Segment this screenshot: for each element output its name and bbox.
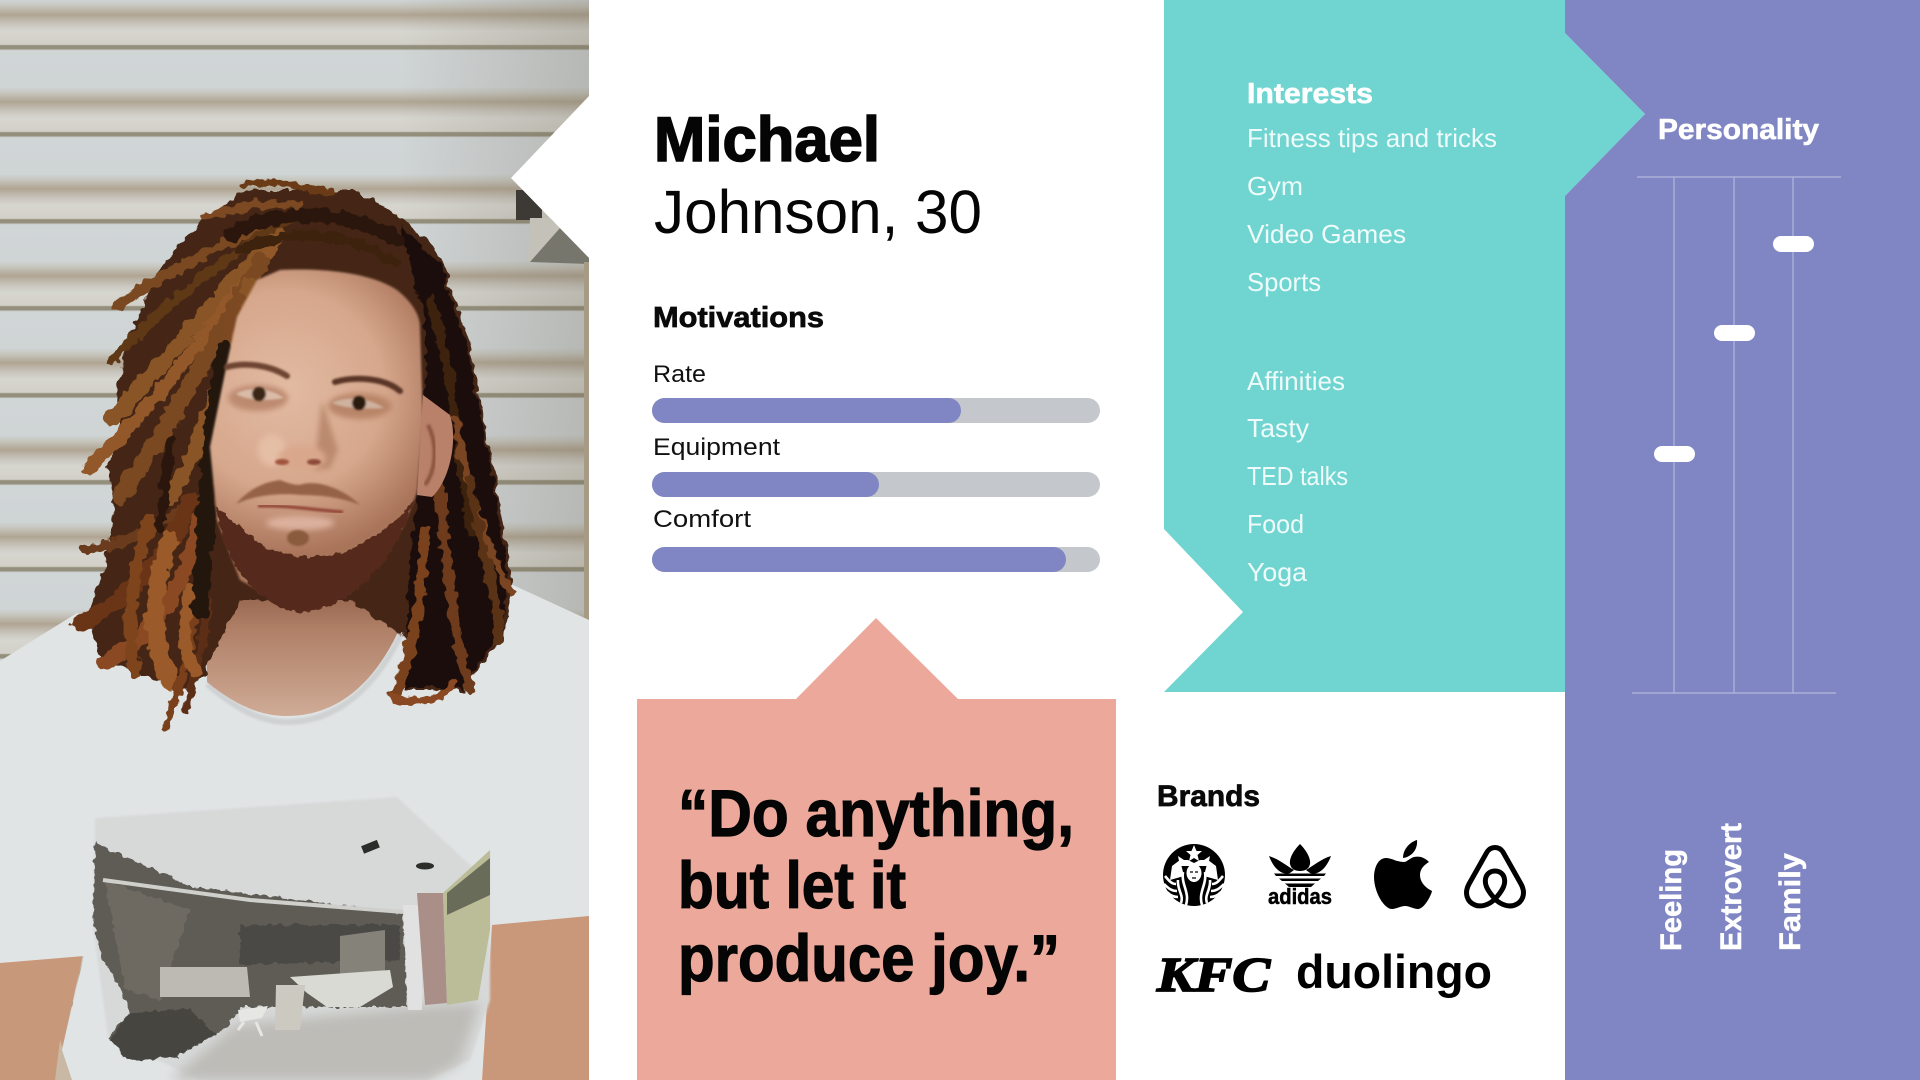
logo: KFC: KFC bbox=[1156, 947, 1272, 1002]
slider marker: extrovert bbox=[1714, 325, 1755, 341]
panel: quote callout (pink) bbox=[637, 618, 1116, 1080]
title: name and age: Michael bbox=[654, 105, 880, 175]
slider marker: family bbox=[1773, 236, 1814, 252]
title: name and age: Johnson, 30 bbox=[654, 178, 982, 246]
axis labels: Extrovert bbox=[1715, 823, 1748, 951]
panel: brands bbox=[1156, 780, 1523, 1002]
slider marker: feeling bbox=[1654, 446, 1695, 462]
panel: motivations bbox=[652, 302, 1100, 572]
axis labels: Feeling bbox=[1655, 849, 1688, 951]
bar: rate bbox=[652, 361, 1100, 423]
list: interests: Fitness tips and tricks bbox=[1247, 123, 1497, 153]
heading: Interests: Interests bbox=[1247, 78, 1373, 110]
logo: adidas: adidas bbox=[1268, 884, 1332, 909]
title: name and age bbox=[654, 105, 982, 246]
list: affinities: TED talks bbox=[1247, 461, 1348, 491]
bar: equipment bbox=[652, 434, 1100, 497]
list: affinities: Affinities bbox=[1247, 366, 1345, 396]
photo: shirt print of a garage bbox=[93, 797, 490, 1080]
photo: portrait of Michael bbox=[0, 0, 589, 1080]
heading: Brands: Brands bbox=[1157, 780, 1260, 813]
quote text bbox=[678, 776, 1074, 995]
heading: Personality: Personality bbox=[1658, 114, 1819, 146]
axis labels: Family bbox=[1774, 853, 1807, 951]
panel: personality (purple) bbox=[1565, 0, 1920, 1080]
heading: Motivations: Motivations bbox=[653, 302, 824, 334]
photo background: slatted shutter wall bbox=[0, 0, 589, 1080]
axis labels bbox=[1655, 823, 1807, 951]
quote text: “Do anything, bbox=[678, 776, 1074, 850]
chart: personality sliders bbox=[1632, 177, 1841, 693]
logo: adidas bbox=[1268, 844, 1332, 909]
list: interests bbox=[1247, 123, 1497, 297]
quote text: produce joy.” bbox=[678, 921, 1060, 995]
photo: dreadlock hair bbox=[80, 183, 512, 728]
panel: interests (teal) bbox=[1164, 0, 1645, 692]
list: interests: Video Games bbox=[1247, 219, 1406, 249]
bar: rate: Rate bbox=[653, 361, 706, 388]
list: affinities: Yoga bbox=[1247, 557, 1308, 587]
photo: neck bbox=[206, 600, 398, 716]
photo: arms and skin bbox=[0, 915, 589, 1080]
logo: duolingo: duolingo bbox=[1296, 945, 1492, 998]
bar: equipment: Equipment bbox=[653, 434, 780, 461]
photo: eyes and brows bbox=[227, 365, 400, 410]
logo: airbnb bbox=[1467, 848, 1523, 906]
bar: comfort bbox=[652, 506, 1100, 572]
quote text: but let it bbox=[678, 848, 906, 922]
list: interests: Sports bbox=[1247, 267, 1321, 297]
list: interests: Gym bbox=[1247, 171, 1303, 201]
logo: starbucks bbox=[1163, 844, 1225, 906]
bar: comfort: Comfort bbox=[653, 506, 751, 533]
list: affinities: Food bbox=[1247, 509, 1304, 539]
photo: face bbox=[210, 270, 453, 613]
list: affinities bbox=[1247, 366, 1348, 587]
logo: apple bbox=[1374, 840, 1432, 909]
list: affinities: Tasty bbox=[1247, 413, 1309, 443]
photo: white t-shirt bbox=[0, 585, 589, 1080]
photo: beard and mouth bbox=[216, 480, 414, 613]
